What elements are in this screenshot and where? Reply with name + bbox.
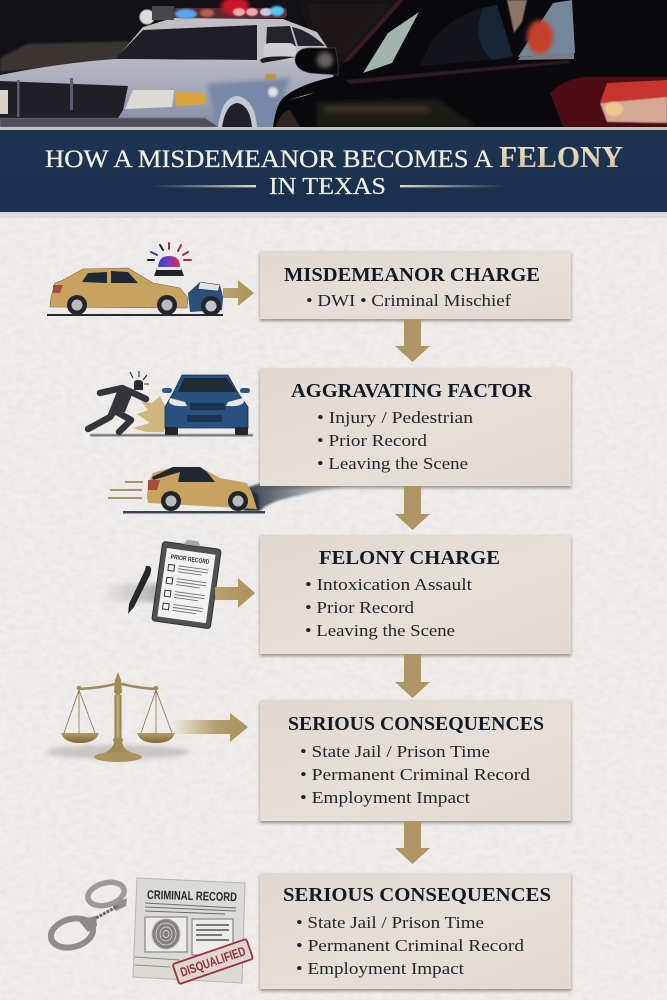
bullet list: • Prior Record [305,598,415,617]
icon: criminal record document: CRIMINAL RECORD [147,888,237,904]
icon: tan sedan crashing into blue car [47,268,223,316]
police car [0,18,335,127]
panel: felony charge [260,535,571,654]
impact burst [133,396,168,432]
crashed blue car front [188,282,223,316]
heading: MISDEMEANOR CHARGE [284,265,540,286]
arrow: misdemeanor to aggravating [395,319,430,362]
bullet list: • Permanent Criminal Record [296,936,525,955]
title highlight: felony: FELONY [499,139,623,174]
bullet list: • State Jail / Prison Time [300,742,490,761]
arrow: clipboard to felony panel [215,578,255,608]
stamp: disqualified: DISQUALIFIED [178,943,247,980]
bullet text: • DWI • Criminal Mischief [306,291,511,310]
panel: misdemeanor charge [260,251,571,319]
speed lines [108,481,143,499]
bullet list: • Intoxication Assault [305,575,472,594]
clipboard: PRIOR RECORD [170,554,210,566]
bullet list: • State Jail / Prison Time [296,913,484,932]
icon: car fleeing the scene [108,467,265,514]
light bar [140,0,287,24]
bullet list: • Prior Record [317,431,428,450]
running person [88,371,149,432]
icon: pedestrian struck by blue car [88,371,253,436]
bullet list: • Injury / Pedestrian [317,408,474,427]
heading: AGGRAVATING FACTOR [291,381,533,402]
bullet list [296,913,525,978]
icon: police emergency light [148,243,191,276]
heading: SERIOUS CONSEQUENCES [288,714,544,735]
header photo: police traffic stop at night [0,0,667,127]
bullet list: • Employment Impact [296,959,464,978]
icon: handcuffs [48,879,127,952]
bullet list [317,408,474,473]
dark car in foreground [273,0,667,127]
bullet list [300,742,531,807]
arrow: scales to consequences panel [172,713,248,742]
smoke from fleeing car [243,484,362,511]
panel: aggravating factor [260,368,571,486]
arrow: aggravating to felony [395,486,430,530]
bullet list: • Leaving the Scene [305,621,455,640]
panel: serious consequences 1 [260,700,571,821]
bullet list: • Leaving the Scene [317,454,468,473]
arrow: consequences to consequences [395,821,430,864]
heading: SERIOUS CONSEQUENCES [283,885,551,906]
title: HOW A MISDEMEANOR BECOMES A [45,144,494,173]
pen [128,566,151,614]
icon: prior record clipboard and pen [100,536,222,629]
arrow: felony to consequences [395,654,430,698]
icon: scales of justice [46,672,190,762]
bullet list: • Employment Impact [300,788,470,807]
arrow: car to misdemeanor panel [223,280,254,306]
title banner [0,127,667,218]
blue car front [162,375,250,435]
heading: FELONY CHARGE [319,548,500,569]
bullet list [305,575,472,640]
panel: serious consequences 2 [260,873,571,989]
bullet list: • Permanent Criminal Record [300,765,531,784]
icon: criminal record document [133,878,253,984]
subtitle: IN TEXAS [269,174,386,200]
